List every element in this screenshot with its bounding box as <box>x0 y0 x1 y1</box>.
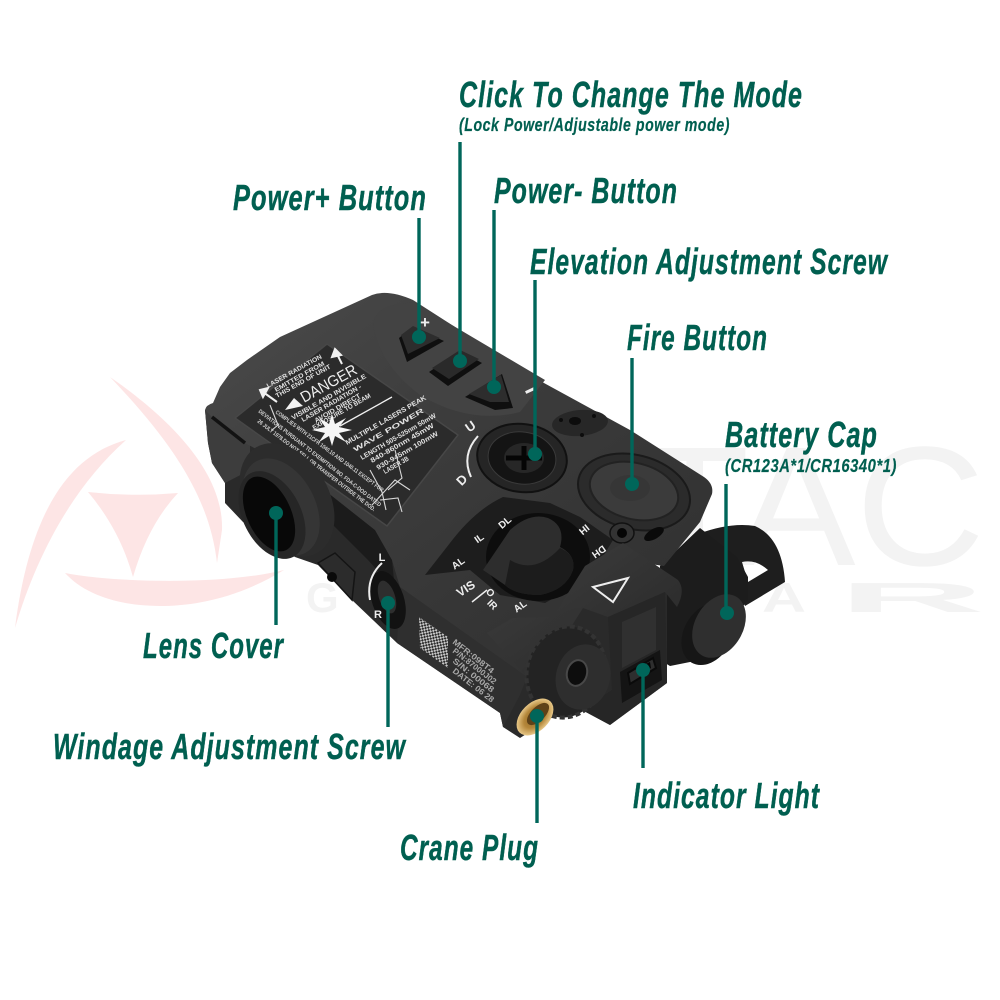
rail bracket <box>582 592 667 725</box>
dial recess <box>425 497 613 603</box>
fire button <box>570 442 698 542</box>
selector knob <box>483 516 573 595</box>
label: laser specifications: MULTIPLE LASERS PEAK <box>344 395 428 447</box>
label: laser starburst <box>312 397 392 446</box>
callout: fire button <box>625 317 768 491</box>
label: laser specifications: 840-860nm 45mW <box>370 422 436 465</box>
label: laser specifications: LASER 3B <box>382 456 410 476</box>
label: arrows <box>260 349 342 402</box>
label: radiation warning: THIS END OF UNIT <box>275 364 332 400</box>
label: compliance text: DEVIATIONS PURSUANT TO EXEMPTION NO. FDA-C-DOD DATED <box>257 409 382 508</box>
callout: click to change the mode: Click To Change The Mode <box>459 74 803 115</box>
plus and minus marks: + <box>420 313 430 332</box>
label: visible warning text <box>290 373 373 432</box>
callout: crane plug: Crane Plug <box>400 827 539 868</box>
watermark: grey company name: E <box>540 574 568 621</box>
plus and minus marks <box>420 313 536 394</box>
dial labels: DL <box>497 515 514 532</box>
QR code <box>419 617 448 668</box>
dial labels <box>450 515 608 615</box>
label: compliance text: COMPLIES WITH 21CFR 1040.10 AND 1040.11 EXCEPT FOR <box>274 410 385 494</box>
label: warning triangle <box>285 398 303 410</box>
callout: power minus button: Power- Button <box>494 170 678 211</box>
body lower silhouette <box>205 410 667 738</box>
watermark: grey company name: A <box>762 574 806 621</box>
label: laser specifications: 930-945nm 100mW <box>376 430 440 472</box>
dial inner ring <box>486 513 590 601</box>
dial labels: VIS <box>454 578 478 600</box>
watermark: grey company name <box>306 412 985 621</box>
callout: elevation adjustment screw <box>528 241 888 461</box>
callout: power plus button <box>233 177 427 344</box>
dial labels: AL <box>450 556 467 572</box>
label: visible warning text: AVOID DIRECT <box>314 393 362 425</box>
dark recess below label <box>308 477 395 590</box>
mode button <box>429 350 482 386</box>
callout: click to change the mode <box>453 74 803 368</box>
serial text: P/N:87000J02 <box>451 646 498 686</box>
label: radiation warning: EMITTED FROM <box>274 360 326 394</box>
label: compliance text: 26 JULY 1978.DO NOT SELL OR TRANSFER OUTSIDE THE DOD. <box>256 419 376 513</box>
bumper slot <box>212 417 245 443</box>
directional triangle <box>593 578 628 602</box>
callout: power plus button: Power+ Button <box>233 177 427 218</box>
label: laser specifications: WAVE POWER <box>352 408 425 454</box>
warning label plate <box>235 344 458 526</box>
watermark: grey company name: R <box>838 574 985 621</box>
callout: click to change the mode: (Lock Power/Adjustable power mode) <box>459 115 730 135</box>
dial labels: DH <box>589 542 608 560</box>
strap loop <box>698 525 785 606</box>
callout: battery cap: Battery Cap <box>725 414 878 455</box>
mounting detail under lens <box>318 553 355 600</box>
windage screw: R <box>374 609 382 621</box>
watermark: grey company name: G <box>306 574 339 621</box>
knurled front cylinder <box>516 617 618 727</box>
dial labels: IH <box>576 521 591 536</box>
dial labels: IR <box>484 598 500 613</box>
battery cap <box>671 585 757 675</box>
serial text <box>451 637 498 705</box>
callout: indicator light <box>633 663 820 816</box>
dial labels: IL <box>473 532 486 546</box>
elevation arrow and letters: D <box>453 471 470 488</box>
callout: crane plug <box>400 709 544 868</box>
side panel with QR <box>397 587 527 727</box>
label: visible warning text: VISIBLE AND INVISIBLE <box>290 373 368 422</box>
callout: lens cover: Lens Cover <box>143 625 284 666</box>
serial text: S/N: 00068 <box>451 656 496 695</box>
serial text: MFR:098T4 <box>451 637 496 676</box>
callout: indicator light: Indicator Light <box>633 775 820 816</box>
top face <box>205 293 712 677</box>
windage screw: L <box>379 552 386 564</box>
front housing block <box>487 543 682 677</box>
label: laser specifications: LENGTH 505-525nm 50mW <box>360 412 438 462</box>
elevation arrow and letters: U <box>462 417 479 435</box>
label: radiation warning <box>266 353 332 400</box>
lens cover <box>220 426 354 574</box>
power minus button <box>465 374 513 410</box>
callout: power minus button <box>487 170 678 394</box>
power plus button <box>399 326 444 362</box>
dial labels: AL <box>512 599 529 615</box>
label: laser specifications <box>344 395 440 476</box>
indicator light window <box>628 658 656 684</box>
label: scratches <box>270 405 410 512</box>
watermark: grey company name: TAC <box>640 412 985 602</box>
top small detail plate <box>551 408 609 438</box>
button panel <box>373 302 545 416</box>
hex screw <box>610 523 666 544</box>
callout: battery cap: (CR123A*1/CR16340*1) <box>725 456 897 476</box>
callout: battery cap <box>720 414 897 620</box>
label: danger: DANGER <box>298 362 360 406</box>
crane plug <box>510 692 560 742</box>
callout: windage adjustment screw <box>53 596 406 767</box>
label: visible warning text: EXPOSURE TO BEAM <box>312 392 373 432</box>
label: visible warning text: LASER RADIATION - <box>300 384 363 424</box>
windage screw <box>364 552 412 633</box>
rear battery housing <box>660 528 748 666</box>
elevation arrow and letters <box>453 417 479 488</box>
serial text: DATE: 06 28 <box>451 666 496 705</box>
callout: windage adjustment screw: Windage Adjustment Screw <box>53 726 406 767</box>
left bumper <box>205 408 250 483</box>
callout: lens cover <box>143 506 284 666</box>
watermark: red triangle logo <box>15 377 284 628</box>
device: laser unit <box>205 293 785 742</box>
dial labels: O <box>483 587 497 600</box>
label: radiation warning: LASER RADIATION <box>266 353 324 390</box>
elevation adjustment screw <box>473 418 571 498</box>
callout: fire button: Fire Button <box>627 317 768 358</box>
